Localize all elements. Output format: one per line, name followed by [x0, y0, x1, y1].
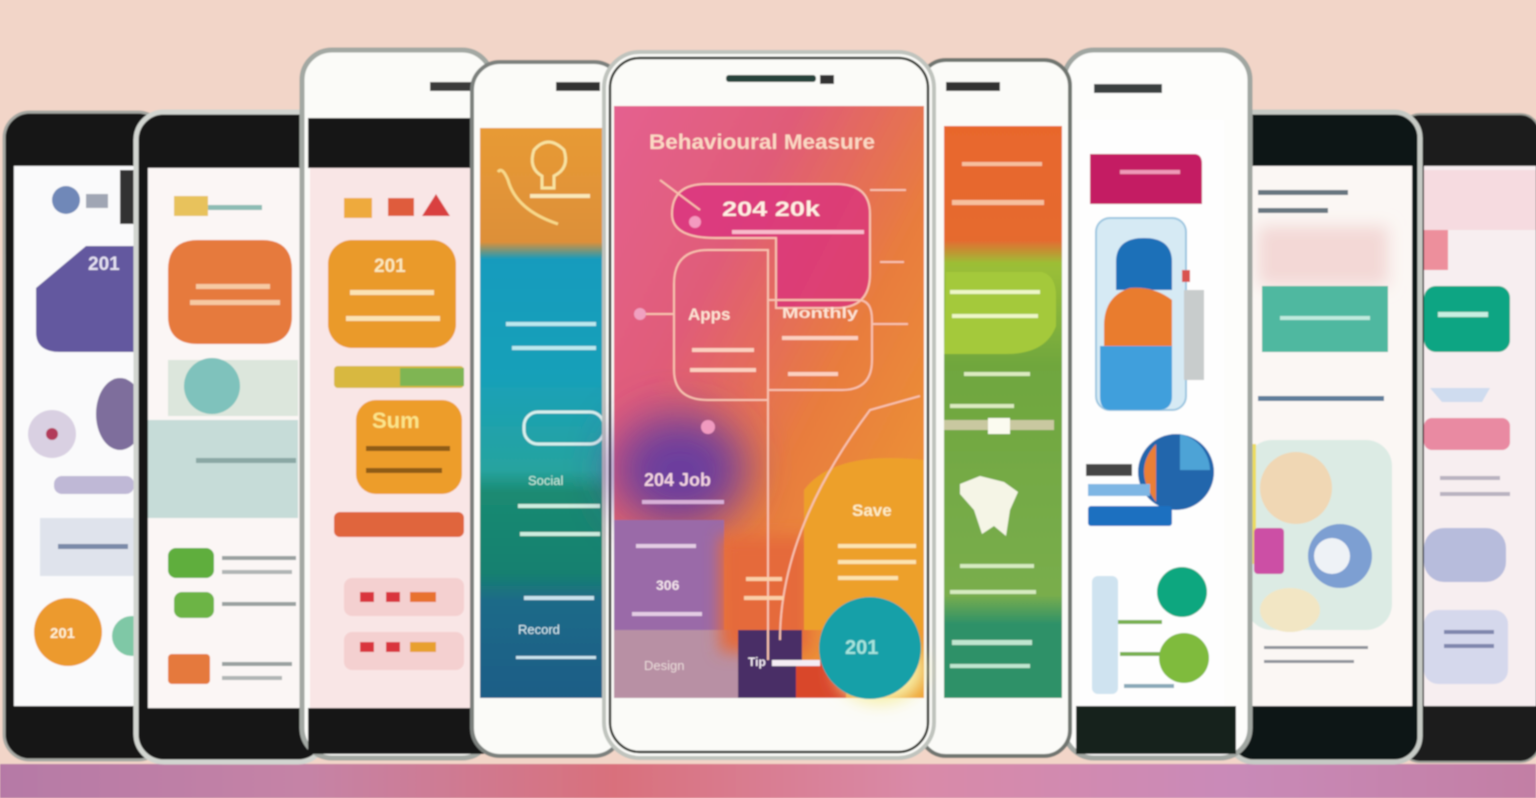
orange note lines [744, 577, 784, 600]
phone: far left [4, 112, 164, 760]
screen content: right 3 [1086, 154, 1214, 694]
speaker [726, 75, 816, 82]
floor strip [0, 764, 1536, 798]
screen content: right 2 [1242, 190, 1392, 663]
screen blends [614, 414, 924, 704]
lavender block lower rule [632, 612, 702, 616]
phone: inner left [472, 62, 622, 756]
flow diagram [640, 180, 920, 660]
screen content: far right [1424, 170, 1536, 684]
phone: center [604, 52, 934, 758]
screen content: left 3: Sum [372, 408, 420, 433]
diagram text: 204 20k [722, 198, 820, 221]
design label: Design [644, 658, 684, 673]
phone: right 2 [1228, 112, 1420, 762]
teal stat circle [819, 597, 921, 699]
diagram text [688, 198, 864, 376]
phone: left 3 (tall) [302, 50, 492, 758]
teal stat circle: 201 [845, 637, 878, 659]
dark label: Tip [748, 655, 766, 669]
marker: lower node [701, 420, 715, 434]
purple stat: 204 Job [644, 470, 711, 490]
marker: top node [689, 216, 701, 228]
screen content: inner right [944, 162, 1056, 668]
phone: inner right [920, 60, 1070, 756]
screen content: left 3 [328, 194, 464, 670]
amber card lines [838, 544, 916, 580]
amber card title: Save [852, 501, 892, 520]
screen content: left 2 [148, 196, 298, 684]
phone: far right [1400, 114, 1536, 762]
screen content: inner left: Record [518, 622, 560, 637]
purple stat rule [642, 500, 724, 504]
screen content: far left: 201 [88, 254, 120, 275]
screen content: left 3: 201 [374, 256, 406, 277]
screen content: far left [28, 170, 152, 666]
phone: right 3 (tall white) [1064, 50, 1250, 758]
lavender block rule [636, 544, 696, 548]
phone: left 2 [136, 112, 326, 762]
center heading: Behavioural Measure [649, 131, 875, 154]
diagram text: Apps [688, 305, 730, 324]
lavender block number: 306 [656, 577, 680, 593]
screen content: far left: 201 [50, 625, 75, 642]
dark label rule [772, 660, 820, 666]
screen content: inner left [498, 142, 604, 659]
marker: left node [634, 308, 646, 320]
screen content: inner left: Social [528, 473, 564, 488]
diagram text: Monthly [782, 305, 859, 322]
